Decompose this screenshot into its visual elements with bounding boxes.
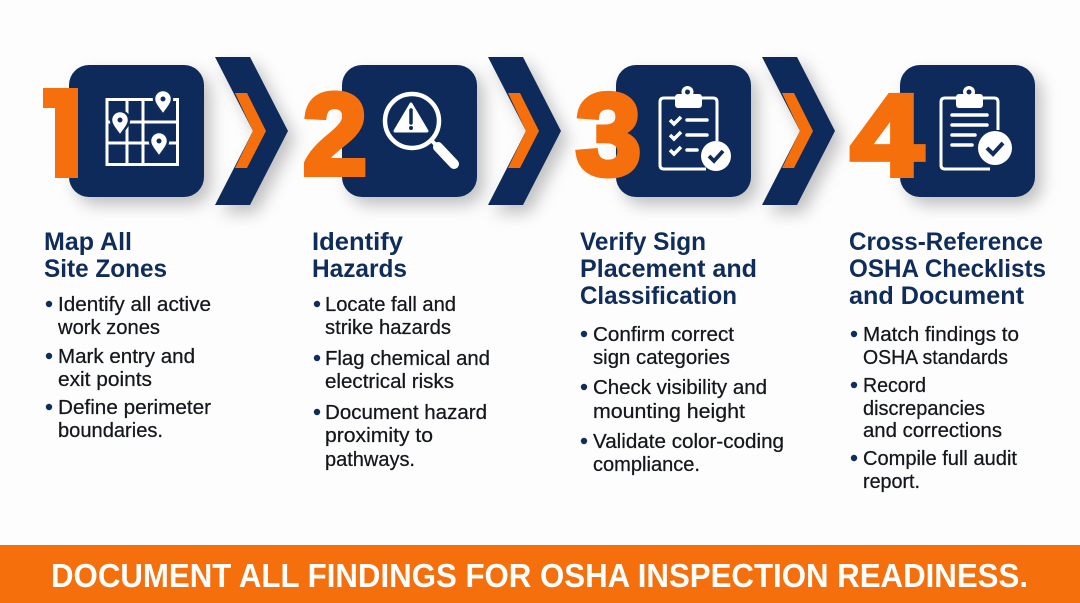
heading: Identify Hazards: Hazards	[312, 255, 407, 283]
bullet list 1: Define perimeter	[58, 397, 211, 419]
bullet list 2: strike hazards	[325, 317, 451, 339]
chevron arrow 2	[488, 57, 561, 205]
bullet list 4: OSHA standards	[863, 347, 1008, 369]
number 4: 4	[851, 72, 923, 200]
bullet list 1	[46, 294, 211, 442]
icon tile: audit report	[900, 65, 1035, 197]
heading: Verify Sign Placement and Classification	[580, 228, 757, 310]
bullet list 2: Flag chemical and	[325, 348, 490, 370]
bullet list 1: work zones	[57, 317, 160, 339]
bullet list 3: Check visibility and	[593, 377, 767, 399]
number 3: 3	[576, 71, 641, 199]
heading: Verify Sign Placement and Classification: Classification	[580, 282, 737, 310]
heading: Cross-Reference OSHA Checklists and Document: OSHA Checklists	[849, 255, 1046, 283]
icon tile: map	[69, 65, 204, 197]
bullet list 2: Locate fall and	[325, 294, 456, 316]
icon tile: hazard search	[342, 65, 477, 197]
bullet list 1: boundaries.	[58, 420, 163, 442]
bullet list 4: report.	[863, 471, 920, 493]
heading: Verify Sign Placement and Classification: Placement and	[580, 255, 757, 283]
step 3	[576, 57, 835, 476]
number 1	[43, 88, 78, 178]
bullet list 1: exit points	[58, 369, 152, 391]
heading: Cross-Reference OSHA Checklists and Document	[849, 228, 1046, 310]
bullet list 3: Validate color-coding	[593, 431, 784, 453]
bullet list 4	[851, 324, 1019, 493]
bullet list 3	[581, 324, 784, 476]
heading: Identify Hazards: Identify	[312, 228, 403, 256]
heading: Map All Site Zones	[44, 228, 167, 283]
bullet list 2: pathways.	[325, 449, 415, 471]
bullet list 4: Record	[863, 375, 926, 397]
icon: clipboard checklist with badge	[660, 86, 731, 171]
chevron arrow 3	[762, 57, 835, 205]
step 2	[303, 57, 561, 471]
bullet list 3: compliance.	[593, 454, 700, 476]
number 1: 1	[29, 72, 93, 200]
icon: site map with pins	[107, 90, 178, 165]
bullet list 1: Identify all active	[58, 294, 211, 316]
banner text: DOCUMENT ALL FINDINGS FOR OSHA INSPECTION READINESS.	[51, 557, 1028, 594]
bullet list 3: mounting height	[593, 401, 745, 423]
bullet list 1: Mark entry and	[58, 346, 195, 368]
heading: Cross-Reference OSHA Checklists and Document: Cross-Reference	[849, 228, 1043, 256]
footer banner	[0, 545, 1080, 603]
bullet list 4: and corrections	[863, 420, 1002, 442]
heading: Map All Site Zones: Site Zones	[44, 255, 167, 283]
bullet list 2: Document hazard	[325, 402, 487, 424]
bullet list 4: Match findings to	[863, 324, 1019, 346]
step 1	[29, 57, 288, 442]
bullet list 3: sign categories	[593, 347, 730, 369]
bullet list 3: Confirm correct	[593, 324, 734, 346]
bullet list 4: discrepancies	[863, 398, 985, 420]
icon: magnifier with warning triangle	[385, 94, 454, 164]
bullet list 2: electrical risks	[325, 371, 454, 393]
bullet list 4: Compile full audit	[863, 448, 1017, 470]
icon: clipboard report with badge	[941, 86, 1012, 169]
heading: Map All Site Zones: Map All	[44, 228, 132, 256]
step 4	[849, 65, 1046, 493]
heading: Cross-Reference OSHA Checklists and Document: and Document	[849, 282, 1025, 310]
heading: Identify Hazards	[312, 228, 407, 283]
chevron arrow 1	[215, 57, 288, 205]
bullet list 2: proximity to	[325, 425, 433, 447]
icon tile: checklist	[616, 65, 751, 197]
number 2: 2	[303, 71, 367, 199]
bullet list 2	[314, 294, 490, 471]
heading: Verify Sign Placement and Classification: Verify Sign	[580, 228, 706, 256]
